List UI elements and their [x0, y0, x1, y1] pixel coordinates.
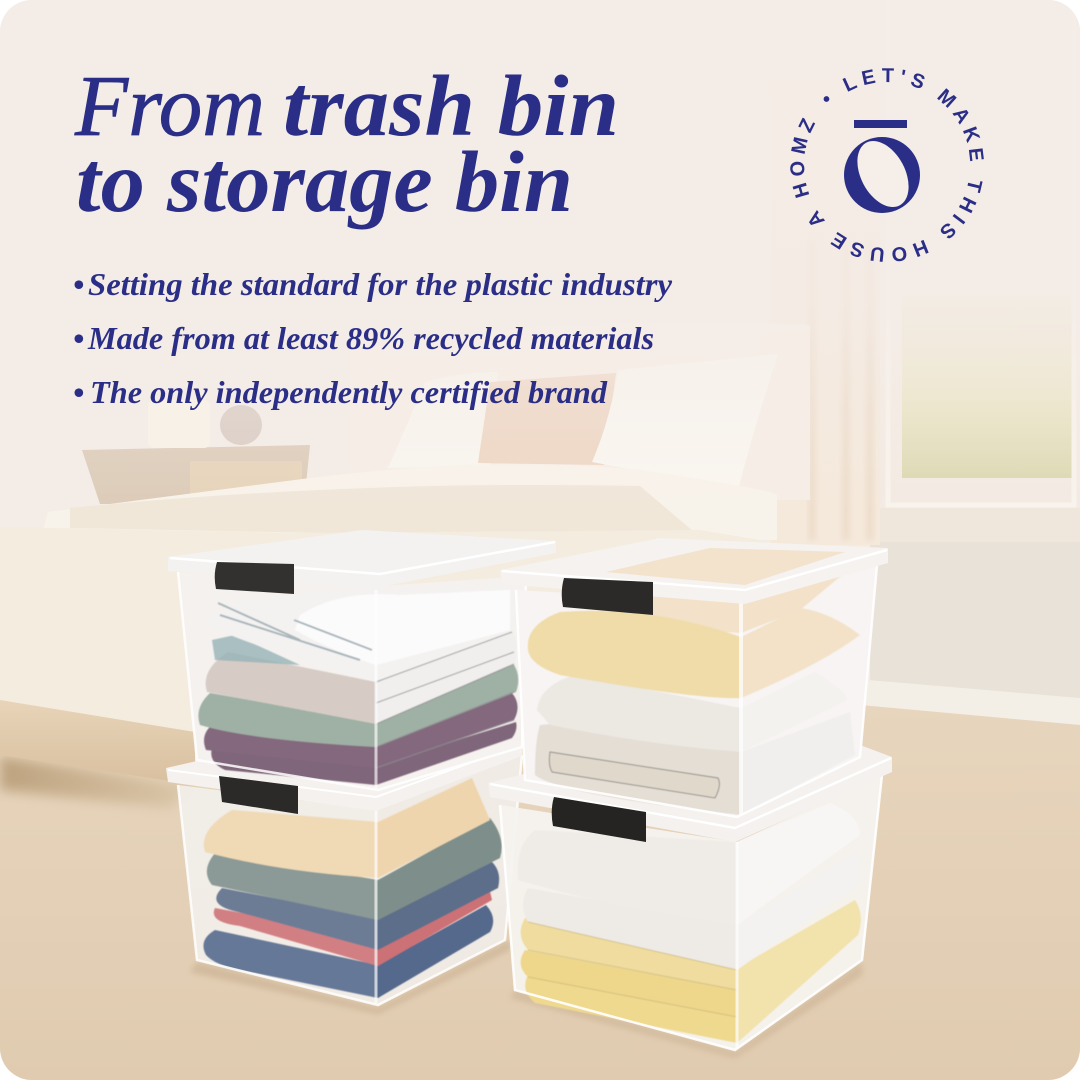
folded clothes [203, 778, 502, 998]
nightstand [82, 445, 310, 504]
body [178, 755, 522, 1005]
bin: top left [168, 530, 556, 790]
lid [488, 745, 892, 842]
title: to storage bin [76, 133, 573, 230]
title: From [74, 57, 265, 154]
shadow [190, 940, 510, 1014]
baseboard [870, 680, 1080, 710]
frost [204, 854, 374, 998]
lid [168, 530, 556, 587]
title: trash bin [283, 57, 619, 154]
circular tagline: • LET'S MAKE THIS HOUSE A HOMZ [790, 68, 984, 262]
bin: bottom right [488, 745, 892, 1058]
latch [215, 562, 294, 594]
pillows [478, 373, 750, 486]
logo mark [844, 120, 920, 216]
latch [562, 578, 653, 615]
bed base [0, 700, 195, 785]
latch [552, 797, 646, 842]
bin: bottom left [166, 740, 522, 1014]
folded clothes [528, 570, 860, 815]
bullet marks: • [73, 266, 84, 302]
curtains [770, 324, 880, 545]
lamp base [176, 447, 207, 448]
carpet [0, 705, 1080, 1080]
frost [178, 572, 526, 790]
bullet 2: Made from at least 89% recycled materials [87, 320, 654, 356]
frost [516, 565, 877, 817]
fade over upper scene [82, 0, 1072, 454]
bullet 1: Setting the standard for the plastic industry [88, 266, 673, 302]
shadow under bed [0, 756, 196, 808]
bed mattress [40, 528, 758, 540]
logo badge [790, 68, 984, 262]
bullet mark 2: • [73, 320, 84, 356]
headboard [770, 332, 810, 500]
body [180, 572, 524, 758]
bullet 3: The only independently certified brand [90, 374, 608, 410]
lid [500, 538, 888, 604]
folded clothes [520, 837, 862, 1044]
bullet list [73, 266, 673, 410]
shadow [510, 962, 862, 1058]
folded clothes [198, 585, 518, 785]
body [500, 775, 882, 1050]
vase [220, 405, 262, 445]
body [522, 566, 876, 774]
bin: top right [500, 538, 888, 817]
duvet [110, 478, 777, 540]
window [880, 336, 1080, 530]
frost [500, 775, 882, 1050]
bullet mark 3: • [73, 374, 84, 410]
wall lower right [870, 542, 1080, 698]
title [74, 57, 619, 230]
lid [166, 748, 522, 810]
latch [219, 776, 298, 814]
